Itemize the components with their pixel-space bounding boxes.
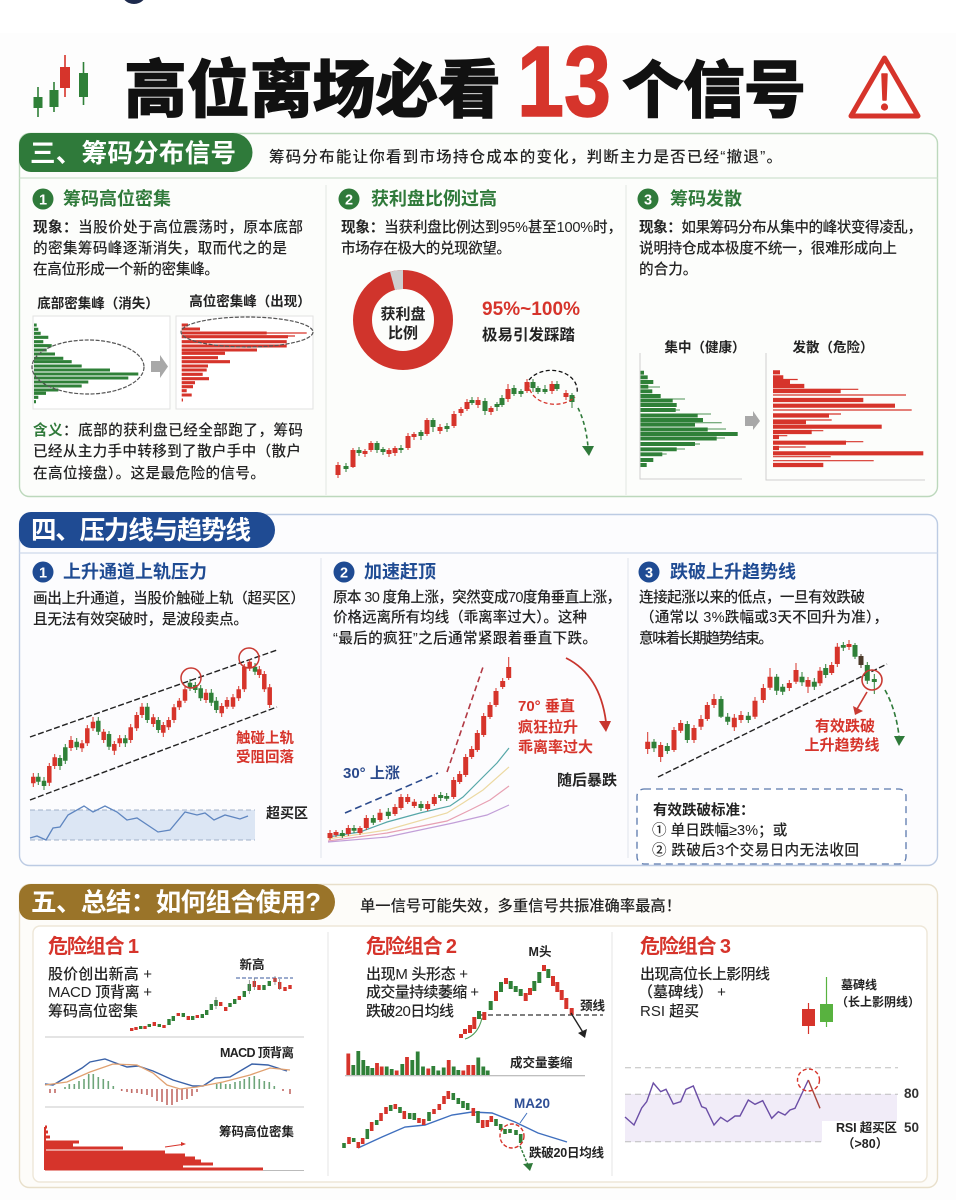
chart: MA20 break: 跌破20日均线 <box>529 1145 604 1160</box>
chart: bottom peak histogram <box>32 316 170 409</box>
combo three text <box>638 965 770 1020</box>
phenomenon text <box>639 218 922 278</box>
arrow: grey <box>745 411 760 430</box>
combo one text: 筹码高位密集 <box>48 1002 138 1020</box>
chart: RSI overbought: 50 <box>904 1120 919 1135</box>
phenomenon text: 在高位形成一个新的密集峰。 <box>33 260 219 278</box>
label: plunge: 随后暴跌 <box>557 771 617 789</box>
meaning text <box>33 421 303 482</box>
panel: section four pressure and trend <box>19 512 938 866</box>
phenomenon text <box>341 218 622 257</box>
block: chip high concentration <box>32 188 313 482</box>
section five subtitle: 单一信号可能失效，多重信号共振准确率最高！ <box>360 898 681 915</box>
chart: RSI overbought: 80 <box>904 1086 919 1101</box>
block: chip divergence <box>638 188 925 480</box>
combo three text: 出现高位长上影阴线 <box>640 965 770 983</box>
chart: shrinking volume: 成交量萎缩 <box>510 1055 573 1070</box>
heading pill: section three <box>19 133 252 172</box>
heading: combo one: 危险组合 1 <box>48 934 139 958</box>
inner panel <box>33 926 927 1182</box>
heading pill: section four: 四、压力线与趋势线 <box>31 517 251 545</box>
chart: MACD divergence: MACD 顶背离 <box>220 1045 294 1060</box>
heading: break trend line: 3 <box>645 566 653 582</box>
title text: 个信号 <box>622 57 806 126</box>
callout: seventy degrees: 乖离率过大 <box>518 738 593 756</box>
chart: RSI overbought <box>625 1068 919 1151</box>
heading: channel upper rail: 1 <box>39 566 47 582</box>
heading pill: section four <box>19 512 275 548</box>
label: gravestone: （长上影阴线） <box>836 994 920 1009</box>
meaning text: 已经从主力手中转移到了散户手中（散户 <box>33 443 301 460</box>
chart: MA20 break: MA20 <box>514 1096 550 1111</box>
meaning text: 在高位接盘）。这是最危险的信号。 <box>33 464 265 482</box>
heading: accelerated top <box>334 562 436 582</box>
heading: accelerated top: 2 <box>340 566 348 582</box>
heading: break trend line: 跌破上升趋势线 <box>670 562 796 582</box>
chart: donut profit ratio: 比例 <box>388 325 418 342</box>
block: channel upper rail <box>30 561 308 840</box>
combo two text: 跌破20日均线 <box>366 1003 454 1020</box>
chart labels: 发散（危险） <box>792 339 874 355</box>
callout: seventy degrees <box>518 697 593 756</box>
phenomenon text: 的合力。 <box>639 261 697 278</box>
heading: high profit ratio: 获利盘比例过高 <box>371 188 497 209</box>
chart: trend line break <box>648 640 905 777</box>
arrow: plunge <box>566 658 611 732</box>
chart: donut profit ratio: 获利盘 <box>380 305 426 323</box>
chart labels <box>664 339 874 355</box>
chart: chip high concentration: 筹码高位密集 <box>219 1124 295 1139</box>
callout: valid break <box>804 717 880 754</box>
panel: section three chip distribution <box>19 133 938 496</box>
callout: rail rejection: 触碰上轨 <box>236 729 294 747</box>
combo one text: 股价创出新高 + <box>48 966 152 983</box>
chart: gravestone candles <box>802 977 833 1034</box>
description <box>333 588 621 647</box>
chart: concentrated histogram <box>640 353 742 479</box>
phenomenon text <box>33 218 303 278</box>
chart: divergent histogram <box>766 353 925 480</box>
chart: shrinking volume <box>345 1051 585 1076</box>
phenomenon text: 说明持仓成本极度不统一，很难形成向上 <box>639 239 897 257</box>
callout: valid break: 有效跌破 <box>815 717 875 735</box>
icon: warning triangle <box>851 58 918 116</box>
chart: rising candles with top <box>338 370 594 478</box>
callout: seventy degrees: 70° 垂直 <box>518 697 575 715</box>
heading: high profit ratio: 2 <box>345 192 353 208</box>
heading pill: section five: 五、总结：如何组合使用? <box>31 889 321 917</box>
description: 原本 30 度角上涨，突然变成70度角垂直上涨， <box>333 588 621 606</box>
heading: chip divergence: 3 <box>644 192 652 208</box>
description: 意味着长期趋势结束。 <box>639 629 773 647</box>
chart: chip high concentration <box>45 1124 304 1170</box>
phenomenon text: 现象：当获利盘比例达到95%甚至100%时， <box>341 218 622 236</box>
title text <box>124 26 806 138</box>
stat: 95 to 100 percent: 95%~100% <box>482 299 580 320</box>
block: high profit ratio <box>338 188 622 478</box>
chart labels: 集中（健康） <box>664 339 746 355</box>
description <box>33 589 305 628</box>
block: danger combo two <box>344 934 606 1171</box>
description: 价格远离所有均线（乖离率过大）。这种 <box>333 609 587 626</box>
chart: high peak histogram <box>176 316 313 409</box>
combo one text: MACD 顶背离 + <box>48 983 152 1001</box>
stat: 95 to 100 percent <box>482 299 580 344</box>
label: gravestone <box>836 977 920 1009</box>
heading pill: section three: 三、筹码分布信号 <box>30 140 236 168</box>
title banner <box>38 26 918 138</box>
chart: RSI overbought: RSI 超买区 <box>836 1120 897 1135</box>
chart: acceleration candles <box>328 657 509 842</box>
block: break trend line <box>637 562 906 864</box>
callout: rail rejection: 受阻回落 <box>236 748 294 766</box>
label: gravestone: 墓碑线 <box>841 977 877 992</box>
combo one text <box>48 966 152 1020</box>
chart: new high candles <box>132 957 293 1031</box>
chart: rising channel <box>30 648 277 800</box>
combo three text: （墓碑线） + <box>638 984 726 1001</box>
description: 且无法有效突破时，是波段卖点。 <box>33 610 248 628</box>
chart labels <box>37 293 311 311</box>
chart: new high candles: 新高 <box>239 957 265 972</box>
meaning text: 含义：底部的获利盘已经全部跑了，筹码 <box>33 421 303 439</box>
heading: channel upper rail: 上升通道上轨压力 <box>63 561 207 582</box>
description: 画出上升通道，当股价触碰上轨（超买区） <box>33 589 305 607</box>
callout: valid break: 上升趋势线 <box>804 736 880 754</box>
chart: donut profit ratio <box>362 280 444 360</box>
stat: 95 to 100 percent: 极易引发踩踏 <box>482 325 576 344</box>
combo two text <box>366 965 479 1020</box>
chart labels: 高位密集峰（出现） <box>189 293 311 309</box>
callout: rail rejection <box>236 729 294 766</box>
phenomenon text: 市场存在极大的兑现欲望。 <box>341 239 511 257</box>
combo two text: 成交量持续萎缩 + <box>366 983 479 1001</box>
heading: chip divergence <box>638 188 742 210</box>
chart labels: 底部密集峰（消失） <box>37 295 159 311</box>
heading: chip high concentration: 1 <box>39 192 47 208</box>
callout: break criteria: 有效跌破标准： <box>653 801 754 819</box>
section three subtitle: 筹码分布能让你看到市场持仓成本的变化，判断主力是否已经“撤退”。 <box>269 147 782 166</box>
chart: overbought indicator <box>30 805 308 840</box>
block: accelerated top <box>328 562 621 842</box>
heading: chip high concentration: 筹码高位密集 <box>63 188 171 209</box>
heading: chip divergence: 筹码发散 <box>670 188 742 209</box>
block: danger combo one <box>45 934 304 1170</box>
heading: combo two: 危险组合 2 <box>366 934 457 958</box>
callout: break criteria: ② 跌破后3个交易日内无法收回 <box>652 841 859 859</box>
chart: M top pattern <box>461 944 606 1039</box>
phenomenon text: 现象：如果筹码分布从集中的峰状变得凌乱， <box>639 218 922 236</box>
title text: 高位离场必看 <box>124 56 501 126</box>
arrow: grey <box>151 355 168 378</box>
description <box>639 589 888 647</box>
chart: M top pattern: M头 <box>529 944 551 959</box>
phenomenon text: 的密集筹码峰逐渐消失，取而代之的是 <box>33 239 287 257</box>
icon: candlesticks <box>38 55 84 117</box>
description: 连接起涨以来的低点，一旦有效跌破 <box>639 589 865 606</box>
panel: section five combination summary <box>19 884 938 1188</box>
callout: break criteria <box>637 789 906 864</box>
heading: accelerated top: 加速赶顶 <box>364 562 436 582</box>
title text: 13 <box>517 26 611 138</box>
chart: MACD divergence <box>45 1045 294 1105</box>
chart: MA20 break <box>344 1091 604 1171</box>
callout: seventy degrees: 疯狂拉升 <box>518 718 578 736</box>
label: thirty degrees: 30° 上涨 <box>343 765 400 782</box>
description: “最后的疯狂”之后通常紧跟着垂直下跌。 <box>333 629 597 647</box>
callout: break criteria: ① 单日跌幅≥3%；或 <box>652 822 788 839</box>
phenomenon text: 现象：当股价处于高位震荡时，原本底部 <box>33 218 303 236</box>
combo two text: 出现M 头形态 + <box>366 965 468 983</box>
heading: combo three: 危险组合 3 <box>640 934 731 958</box>
chart: M top pattern: 颈线 <box>580 998 606 1013</box>
chart: overbought indicator: 超买区 <box>266 805 308 821</box>
combo three text: RSI 超买 <box>640 1003 699 1020</box>
block: danger combo three <box>625 934 920 1151</box>
chart: RSI overbought: （>80） <box>842 1137 888 1151</box>
description: （通常以 3%跌幅或3天不回升为准）， <box>640 609 888 626</box>
